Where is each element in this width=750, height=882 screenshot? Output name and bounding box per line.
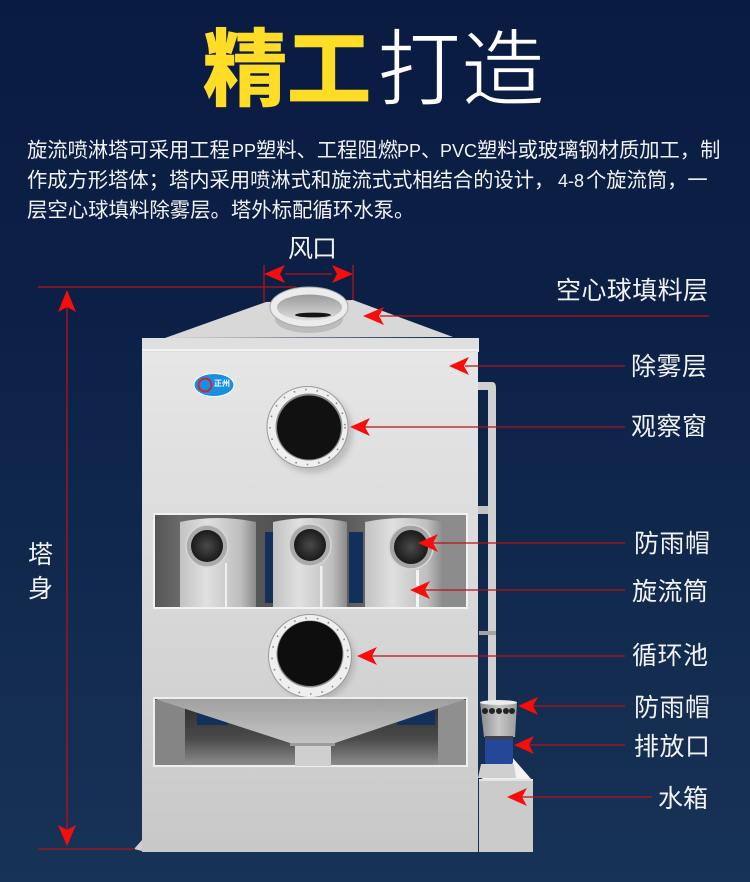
- right cylinder: [365, 518, 443, 607]
- dimension: air outlet: [264, 265, 353, 302]
- water tank: [479, 757, 533, 852]
- intro paragraph: 层空心球填料除雾层。塔外标配循环水泵。: [27, 199, 414, 222]
- title: 精工: [203, 23, 371, 117]
- intro paragraph: PP: [397, 141, 421, 161]
- labels: 塔: [28, 541, 53, 569]
- side drain pipe: [478, 382, 496, 702]
- labels: 旋流筒: [632, 578, 708, 606]
- intro paragraph: 个旋流筒，一: [586, 169, 708, 192]
- labels: 风口: [288, 235, 337, 263]
- arrow: observation window: [350, 418, 625, 436]
- dimension: tower height: [38, 287, 296, 849]
- swirl cylinders bay: [153, 513, 468, 609]
- labels: 循环池: [632, 642, 708, 670]
- arrow: rain cap: [418, 534, 625, 552]
- labels: 空心球填料层: [556, 277, 708, 305]
- labels: 防雨帽: [634, 694, 710, 722]
- logo: [194, 374, 234, 396]
- labels: 观察窗: [631, 413, 707, 441]
- intro paragraph: [27, 139, 720, 222]
- tower base flare: [134, 840, 142, 851]
- title: [203, 23, 545, 117]
- intro paragraph: 塑料或玻璃钢材质加工，制: [477, 139, 720, 162]
- red leader lines and arrows: [38, 265, 709, 849]
- observation window: [267, 386, 353, 473]
- intro paragraph: 塑料、工程阻燃: [256, 139, 398, 162]
- intro paragraph: PP: [232, 141, 256, 161]
- logo: 正州: [214, 379, 230, 388]
- title: 打造: [377, 23, 545, 117]
- labels: [28, 235, 710, 813]
- tower body: [142, 352, 478, 852]
- intro paragraph: 作成方形塔体；塔内采用喷淋式和旋流式式相结合的设计，: [27, 169, 554, 192]
- arrow: demister layer: [449, 357, 625, 375]
- intro paragraph: PVC: [440, 141, 477, 161]
- left cylinder: [180, 518, 256, 607]
- labels: 防雨帽: [634, 530, 710, 558]
- arrow: water tank: [507, 788, 652, 806]
- labels: 水箱: [658, 785, 708, 813]
- lower funnel bay: [153, 697, 468, 767]
- intro paragraph: 旋流喷淋塔可采用工程: [27, 139, 230, 162]
- pump: [478, 700, 517, 778]
- arrow: packing layer: [363, 307, 709, 325]
- circulation tank window: [268, 614, 355, 701]
- equipment: scrubber tower: [134, 287, 533, 852]
- arrow: swirl cylinder: [410, 581, 625, 599]
- intro paragraph: 、: [421, 140, 441, 162]
- middle cylinder: [273, 518, 347, 607]
- arrow: pump rain cap: [518, 697, 625, 715]
- labels: 除雾层: [631, 353, 707, 381]
- roof and air outlet: [142, 287, 479, 352]
- intro paragraph: 4-8: [558, 171, 584, 191]
- arrow: discharge port: [514, 736, 625, 754]
- labels: 排放口: [634, 733, 710, 761]
- arrow: circulation tank: [357, 647, 625, 665]
- labels: 身: [28, 575, 53, 603]
